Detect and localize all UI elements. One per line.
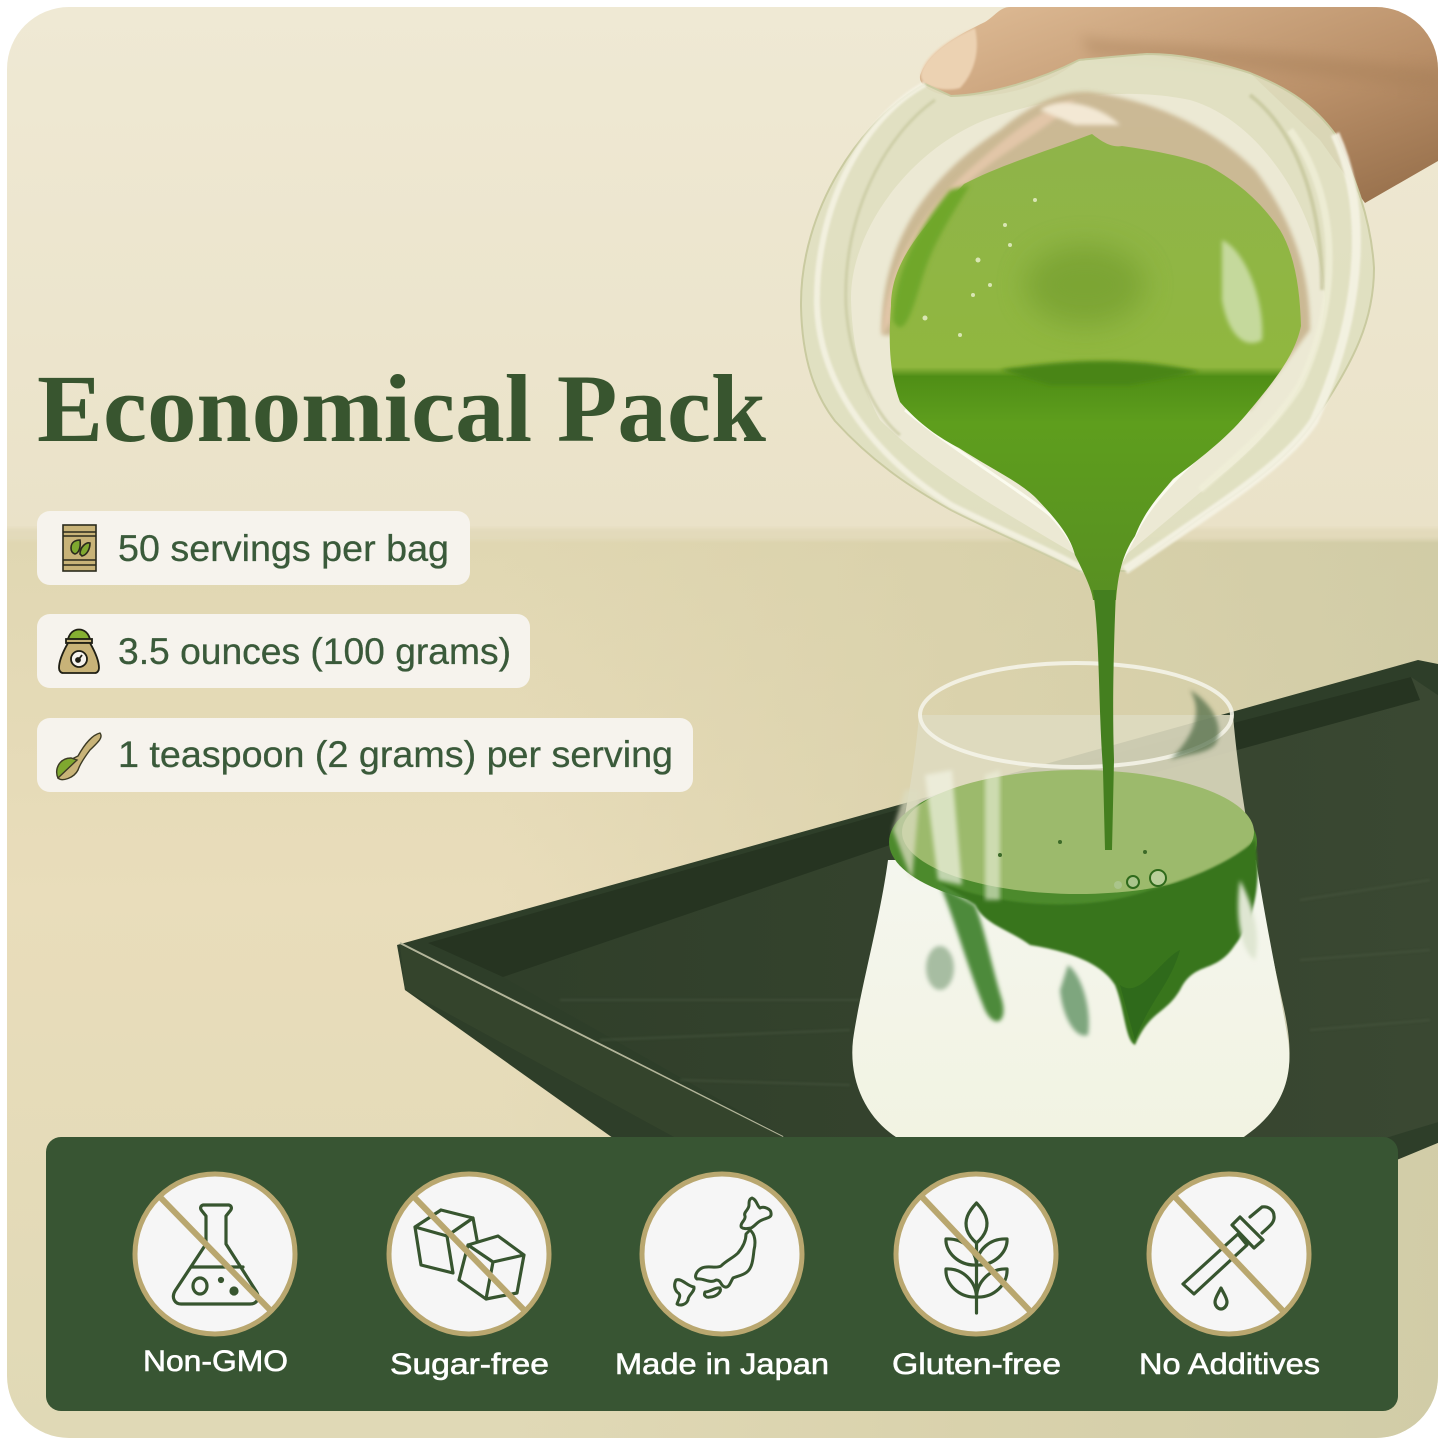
label: Sugar-free (390, 1348, 549, 1381)
icon: dropper (1183, 1207, 1274, 1309)
chip: 50 servings per bag (37, 511, 470, 585)
icon: flask (173, 1205, 258, 1304)
badge: Gluten-free (892, 1174, 1061, 1381)
chip: 50 servings per bag: 50 servings per bag (118, 528, 449, 569)
chip: 3.5 ounces (100 grams): 3.5 ounces (100 grams) (118, 631, 511, 672)
icon: matcha bag (63, 525, 96, 571)
label: No Additives (1139, 1348, 1320, 1381)
icon: spoon with matcha powder (57, 733, 101, 780)
matcha stream (1093, 590, 1116, 850)
icon: weighted powder sack (59, 630, 99, 673)
glass pouring bowl (801, 54, 1374, 571)
badge: Made in Japan (615, 1174, 829, 1381)
panel: product attributes (46, 1137, 1398, 1411)
title: Economical Pack (37, 355, 767, 462)
chip: 3.5 ounces (100 grams) (37, 614, 530, 688)
chip: 1 teaspoon (2 grams) per serving (37, 718, 693, 792)
matcha liquid in the bowl (890, 134, 1301, 600)
badge: No Additives (1139, 1174, 1320, 1381)
label: Made in Japan (615, 1348, 829, 1381)
glass with milk and matcha (852, 663, 1290, 1142)
badge: Non-GMO (135, 1174, 295, 1378)
label: Non-GMO (143, 1345, 288, 1378)
hand holding the bowl (920, 7, 1445, 203)
icon: map of Japan (675, 1198, 771, 1305)
label: Gluten-free (892, 1348, 1061, 1381)
wooden tray (397, 660, 1445, 1200)
chip: 1 teaspoon (2 grams) per serving: 1 teaspoon (2 grams) per serving (118, 734, 673, 775)
icon: wheat (946, 1203, 1007, 1313)
badge: Sugar-free (389, 1174, 549, 1381)
icon: sugar cubes (415, 1210, 524, 1299)
